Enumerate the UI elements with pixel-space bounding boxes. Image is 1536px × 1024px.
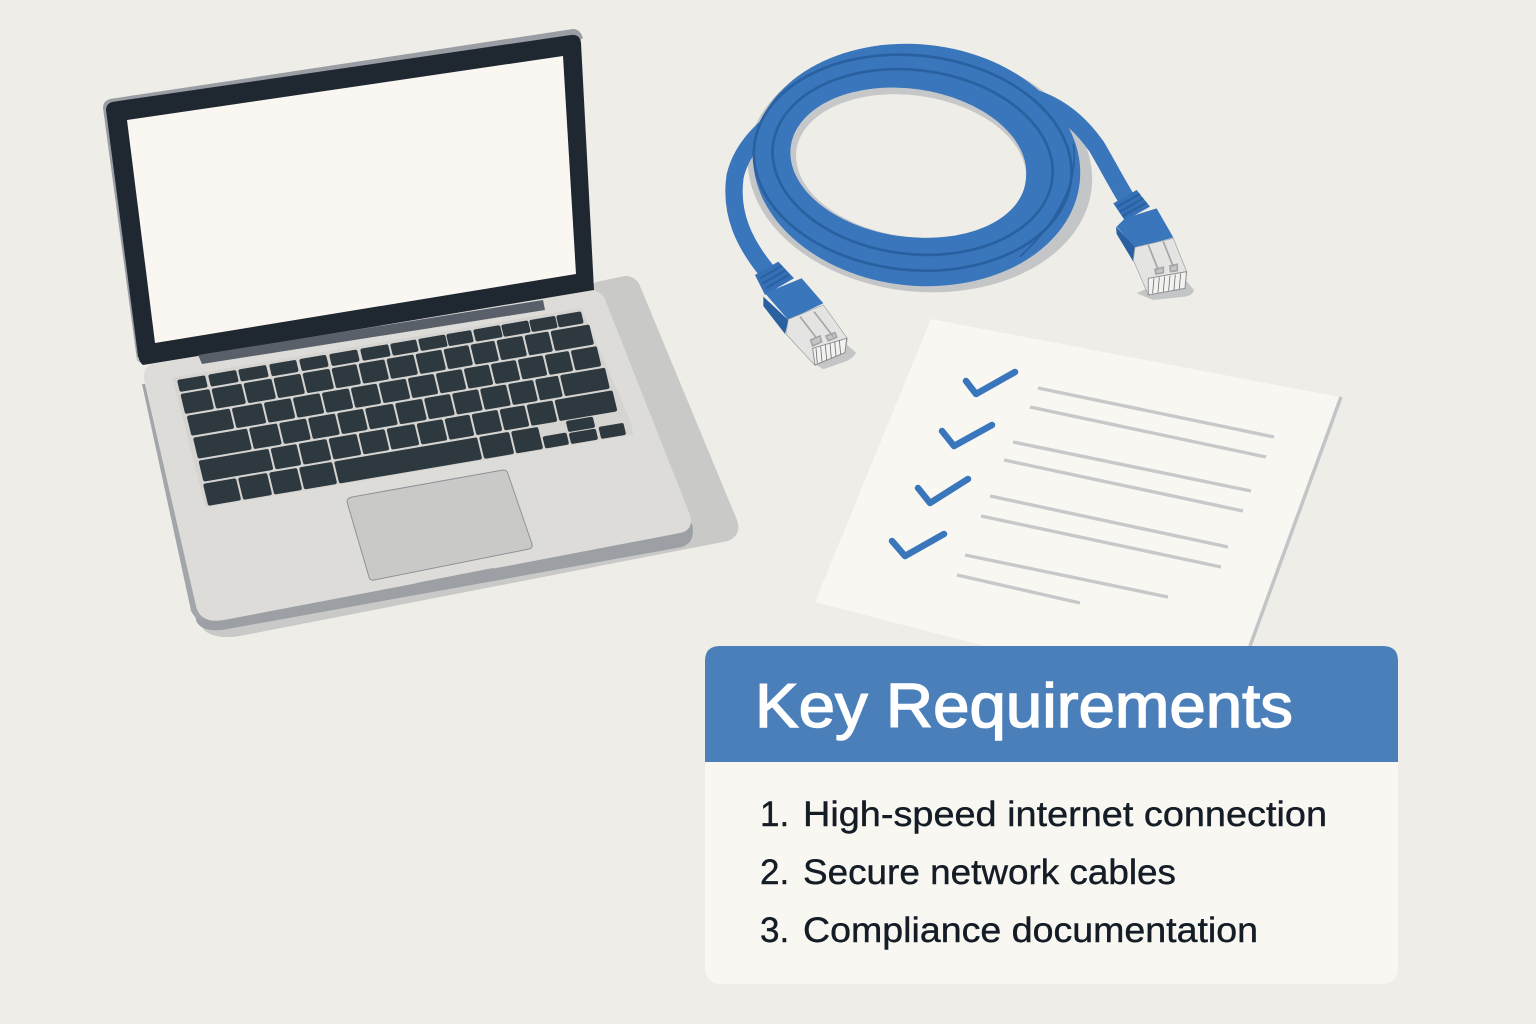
cable coil [741, 28, 1092, 302]
cable shadow [736, 31, 1194, 369]
spacebar key row [203, 412, 626, 506]
checklist lines [957, 388, 1274, 603]
laptop hinge [198, 300, 545, 364]
lower letter key row [198, 390, 617, 482]
laptop lid [103, 29, 594, 365]
laptop base underside [195, 400, 693, 630]
upper letter key row [187, 346, 601, 436]
paper sheet [815, 319, 1339, 650]
function key row [177, 311, 584, 392]
card header band [705, 646, 1398, 762]
item 2: 2. [760, 853, 789, 892]
right cable tail [987, 95, 1128, 202]
number key row [180, 324, 594, 414]
laptop screen [127, 56, 576, 343]
coil hole [781, 73, 1036, 252]
coil winding lines [743, 39, 1082, 286]
requirements list [760, 795, 1327, 950]
right plug [1133, 238, 1187, 295]
icon: network cable [734, 28, 1194, 369]
paper edge shadow [1250, 397, 1341, 646]
check marks [892, 372, 1015, 556]
item 3: Compliance documentation [803, 911, 1258, 950]
icon: checklist document [815, 319, 1341, 650]
laptop front notch [416, 568, 497, 590]
item 3: 3. [760, 911, 789, 950]
home key row [193, 368, 610, 459]
trackpad [347, 470, 532, 580]
card body [705, 646, 1398, 984]
item 1: High-speed internet connection [803, 795, 1327, 834]
left cable tail [734, 97, 820, 275]
laptop drop shadow [190, 276, 738, 637]
laptop base deck [144, 290, 691, 621]
left plug [786, 305, 847, 365]
icon: laptop [103, 29, 738, 637]
keyboard [172, 305, 633, 508]
item 2: Secure network cables [803, 853, 1176, 892]
left connector [755, 262, 847, 365]
right connector [1113, 190, 1187, 295]
panel: key requirements card [705, 646, 1398, 984]
item 1: 1. [760, 795, 789, 834]
heading: Key Requirements [755, 672, 1293, 741]
